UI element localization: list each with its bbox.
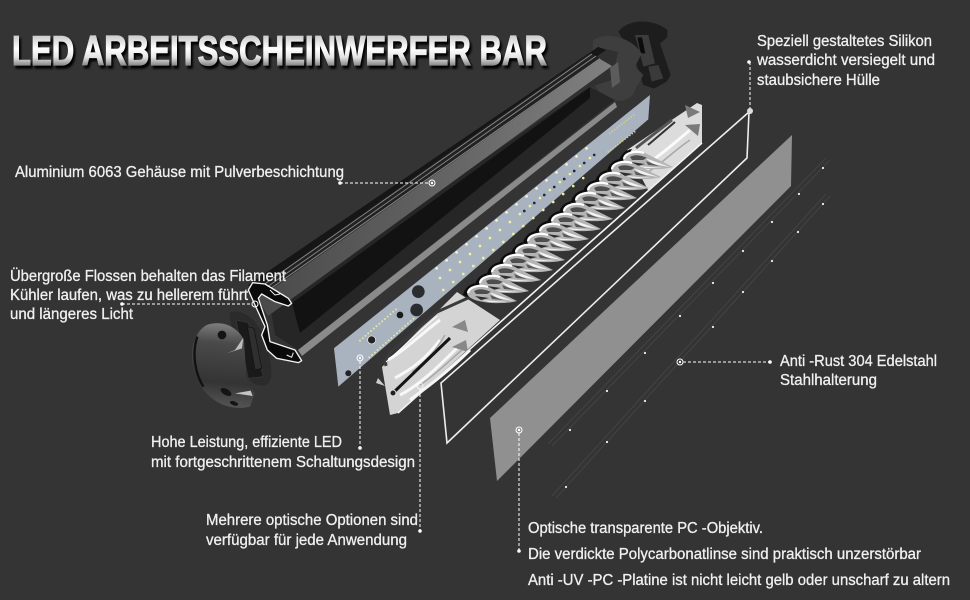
callout: oversized fins: Kühler laufen, was zu hellerem führt (10, 287, 249, 304)
right reflector section (627, 103, 702, 190)
callout: transparent PC lens: Anti -UV -PC -Platine ist nicht leicht gelb oder unscharf zu altern (528, 572, 950, 589)
top dark edge (248, 47, 606, 290)
polycarbonate lens panel (490, 135, 792, 481)
housing cross-section profile (248, 283, 302, 363)
callout: high-performance LED (151, 355, 415, 471)
callout: optical options (206, 383, 423, 549)
callout: oversized fins: und längeres Licht (10, 306, 134, 323)
left reflector section (376, 292, 500, 415)
callout: stainless steel bracket (677, 353, 937, 389)
callout: silicone seal (747, 33, 935, 114)
silicone seal frame (441, 112, 749, 443)
aluminium housing (248, 47, 620, 356)
reflector lower edge (398, 143, 702, 413)
right end cap (590, 21, 671, 101)
callout: aluminium housing (15, 164, 435, 186)
title: LED ARBEITSSCHEINWERFER BAR (12, 27, 547, 74)
callout: optical options: Mehrere optische Optionen sind (206, 512, 418, 529)
LED circuit board (334, 95, 650, 387)
callout: high-performance LED: mit fortgeschrittenem Schaltungsdesign (151, 454, 415, 471)
callout: transparent PC lens: Optische transparente PC -Objektiv. (528, 520, 763, 537)
callout: oversized fins (10, 267, 287, 323)
callout: transparent PC lens: Die verdickte Polycarbonatlinse sind praktisch unzerstörbar (528, 546, 921, 563)
ridges (252, 53, 600, 298)
housing face (248, 47, 618, 303)
lens bullets (463, 149, 673, 303)
optical reflector lens (376, 103, 702, 415)
callout: silicone seal: staubsichere Hülle (757, 72, 880, 89)
end slot (610, 62, 620, 88)
callout: optical options: verfügbar für jede Anwendung (206, 532, 407, 549)
lower flange (298, 102, 617, 356)
callout: transparent PC lens (516, 427, 950, 589)
callout: aluminium housing: Aluminium 6063 Gehäuse mit Pulverbeschichtung (15, 164, 344, 181)
callout: stainless steel bracket: Stahlhalterung (780, 372, 877, 389)
grey band (258, 59, 612, 316)
callout: silicone seal: wasserdicht versiegelt und (756, 52, 935, 69)
thin stainless steel brackets (548, 158, 830, 498)
callout: stainless steel bracket: Anti -Rust 304 Edelstahl (780, 353, 937, 370)
callout: oversized fins: Übergroße Flossen behalten das Filament (10, 267, 287, 285)
left end cap (192, 312, 271, 408)
callout: high-performance LED: Hohe Leistung, effiziente LED (151, 434, 342, 451)
channel (270, 87, 615, 350)
callout: silicone seal: Speziell gestaltetes Silikon (757, 33, 932, 50)
